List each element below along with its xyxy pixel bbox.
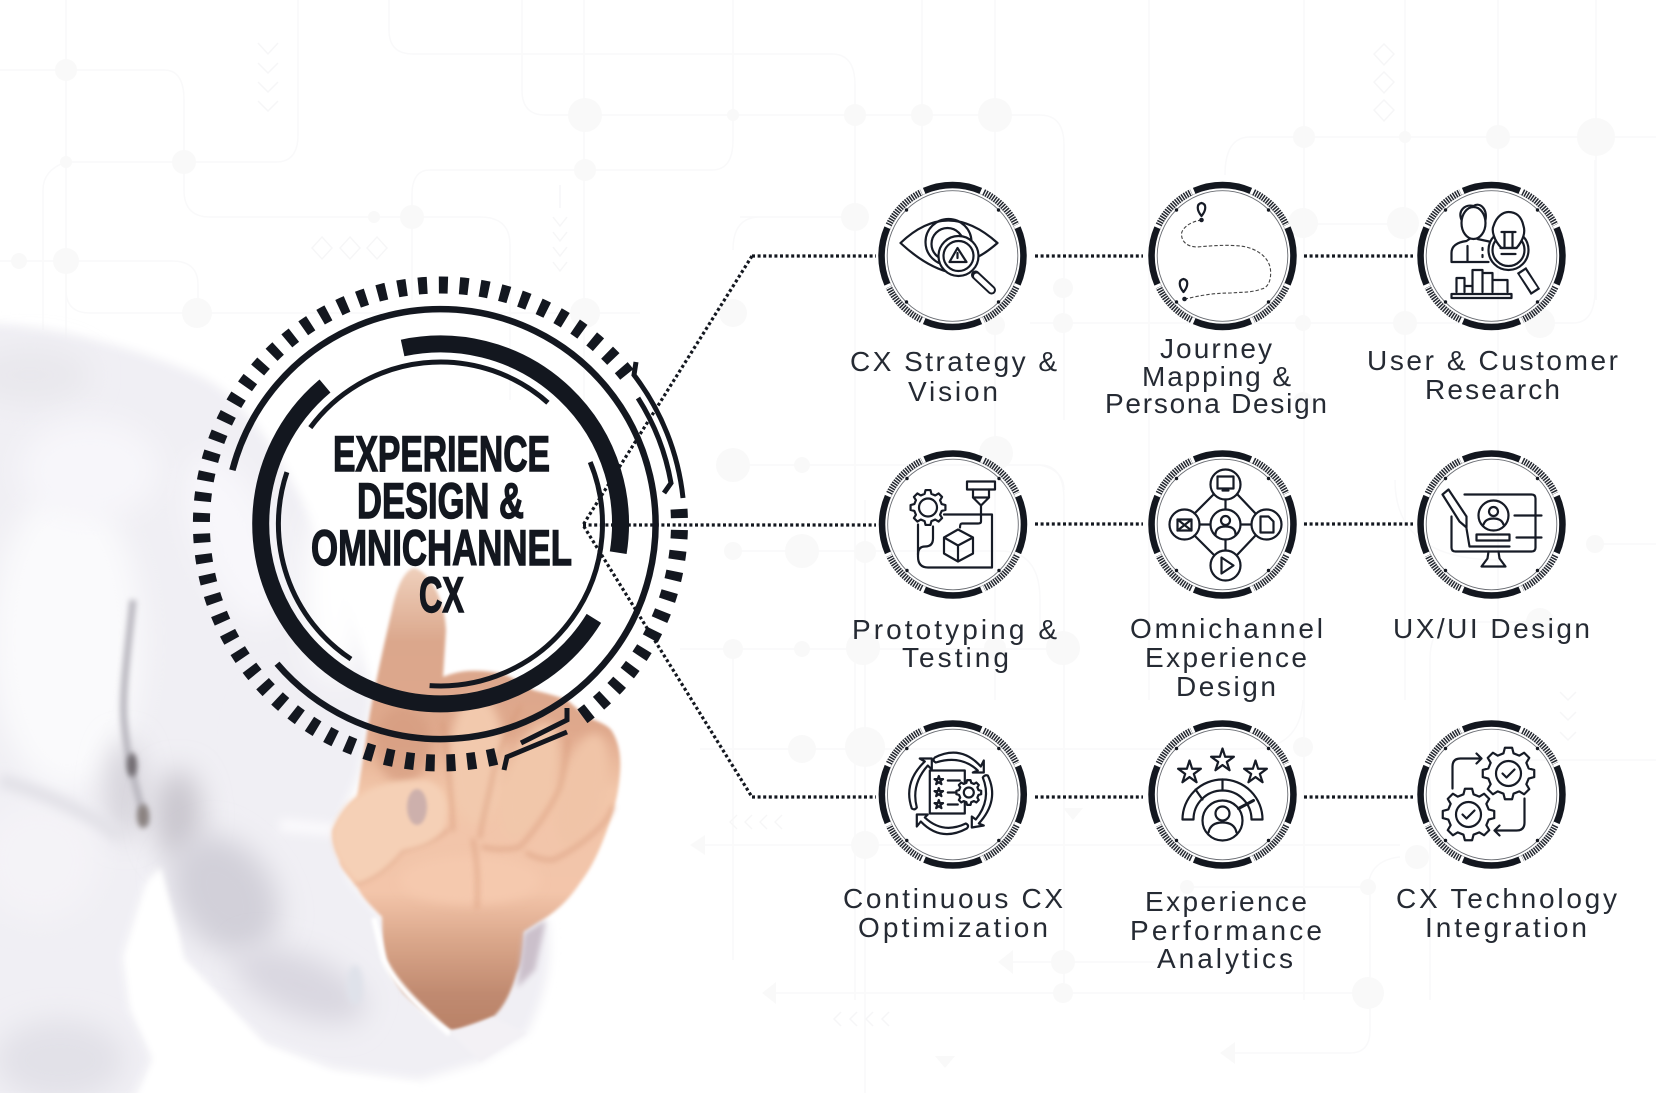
- label: Integration: [1425, 912, 1587, 943]
- icon: eye with magnifier: [900, 219, 998, 290]
- label: Omnichannel: [1130, 613, 1323, 644]
- label: CX Technology: [1396, 883, 1617, 914]
- dotted connectors: [583, 256, 1413, 797]
- label: Testing: [902, 642, 1009, 673]
- ring: [882, 724, 1024, 865]
- label: Performance: [1130, 915, 1322, 946]
- label: Persona Design: [1105, 388, 1327, 419]
- thumbnail: [407, 789, 427, 825]
- label: [852, 614, 1057, 673]
- label: Journey: [1160, 333, 1272, 364]
- node: Prototyping & Testing: [852, 454, 1057, 673]
- label: Design: [1176, 671, 1276, 702]
- photo: person in white shirt: [0, 322, 620, 1093]
- label: CX Strategy &: [850, 346, 1057, 377]
- ring: [882, 185, 1023, 327]
- icon: 3D printer, gear and cube: [911, 482, 995, 568]
- node: CX Technology Integration: [1396, 724, 1617, 943]
- label: [1130, 613, 1323, 702]
- ring: [1152, 724, 1293, 865]
- icon: user, bulb, magnifier and chart: [1452, 205, 1536, 298]
- thick arcs: [261, 344, 621, 704]
- label: Research: [1425, 374, 1560, 405]
- hand: [333, 568, 620, 1030]
- label: [1396, 883, 1617, 943]
- icon: omnichannel network: [1170, 470, 1282, 580]
- label: [843, 883, 1063, 943]
- dashed outer ring: [201, 285, 679, 763]
- node: Continuous CX Optimization: [843, 724, 1063, 943]
- central hub dial: [201, 285, 683, 770]
- label: Experience: [1145, 642, 1307, 673]
- label: [1367, 345, 1618, 405]
- icon: gears with arrows: [1443, 748, 1534, 840]
- title: DESIGN &: [357, 473, 524, 529]
- title: EXPERIENCE: [333, 426, 550, 482]
- icon: rating stars and gauge: [1178, 748, 1267, 840]
- icon: optimization cycle: [909, 753, 992, 834]
- ring: [1421, 724, 1562, 865]
- label: Experience: [1145, 886, 1307, 917]
- label: Vision: [908, 376, 998, 407]
- ring: [1152, 185, 1293, 327]
- ring: [1152, 454, 1293, 595]
- node: Omnichannel Experience Design: [1130, 454, 1323, 702]
- shirt cuff: [347, 918, 546, 1062]
- label: Analytics: [1157, 943, 1293, 974]
- label: Continuous CX: [843, 883, 1063, 914]
- title: OMNICHANNEL: [311, 520, 572, 576]
- node: Experience Performance Analytics: [1130, 724, 1322, 974]
- bracket accents: [504, 362, 683, 770]
- label: Optimization: [858, 912, 1048, 943]
- thumb: [333, 780, 447, 883]
- shirt: [0, 322, 549, 1093]
- title: [311, 426, 572, 623]
- label: Prototyping &: [852, 614, 1057, 645]
- label: User & Customer: [1367, 345, 1618, 376]
- ring: [1421, 185, 1562, 327]
- ring: [1421, 454, 1562, 595]
- label: Mapping &: [1142, 361, 1291, 392]
- white gap between body and sleeve: [127, 868, 420, 1093]
- node: UX/UI Design: [1393, 454, 1590, 644]
- icon: monitor with profile and pencil: [1442, 490, 1542, 566]
- thin outer ring: [232, 309, 656, 739]
- label: UX/UI Design: [1393, 613, 1590, 644]
- node: User & Customer Research: [1367, 185, 1618, 405]
- label: [1105, 333, 1327, 419]
- node: CX Strategy & Vision: [850, 185, 1057, 407]
- label: [850, 346, 1057, 407]
- title: CX: [419, 567, 464, 623]
- label: [1130, 886, 1322, 974]
- node: Journey Mapping & Persona Design: [1105, 185, 1327, 419]
- inner thin arcs: [278, 362, 602, 686]
- ring: [882, 454, 1024, 595]
- icon: journey path with pins: [1180, 203, 1271, 300]
